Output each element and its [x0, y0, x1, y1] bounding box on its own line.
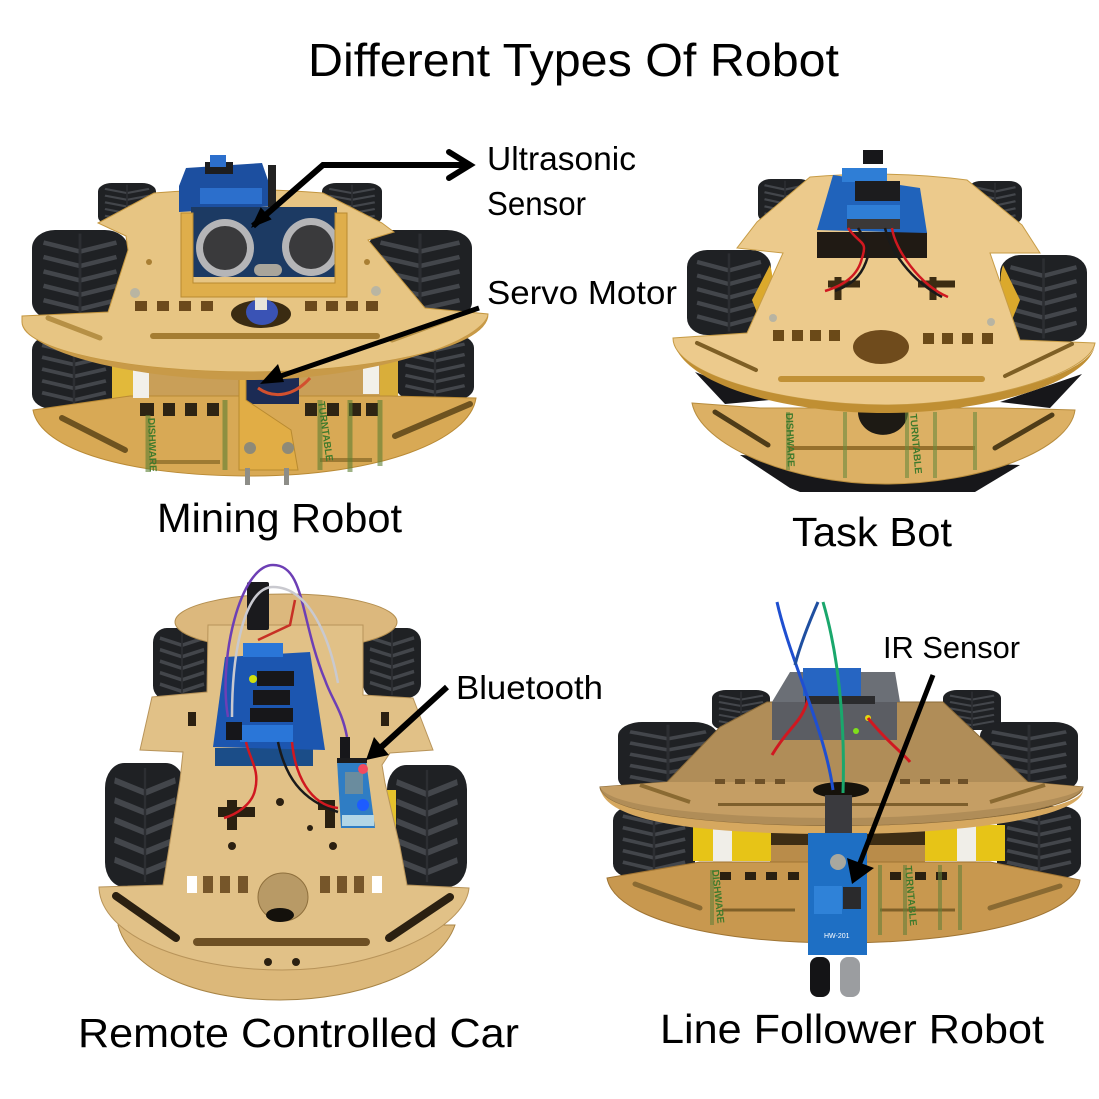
- wires: [825, 228, 948, 297]
- servo horn hole: [231, 296, 291, 328]
- arrow: ir sensor: [847, 675, 933, 884]
- servo bracket: [239, 368, 298, 470]
- label: bluetooth: Bluetooth: [456, 669, 603, 706]
- connector wires: [224, 565, 347, 818]
- lower plate: [118, 925, 455, 1000]
- motor driver shield: [772, 668, 900, 740]
- wheels: remote controlled car: [105, 628, 467, 887]
- sensor connector: [825, 795, 852, 843]
- wheels: line follower robot: [613, 690, 1081, 878]
- upper plate: [600, 702, 1083, 834]
- arrow: servo motor: [260, 308, 479, 384]
- lower plate: DISHWARE: [145, 418, 158, 472]
- motor driver shield: [213, 643, 325, 766]
- ir leds: [810, 957, 860, 997]
- upper plate: [22, 190, 488, 380]
- ultrasonic sensor: [191, 207, 340, 277]
- lower plate: [692, 403, 1075, 484]
- underside between plates: [136, 360, 380, 402]
- sensor bracket: [181, 213, 347, 297]
- label: ultrasonic sensor: Sensor: [487, 185, 586, 222]
- underside between plates: [770, 825, 925, 865]
- arrow: ultrasonic sensor: [253, 152, 470, 226]
- panel: remote controlled car: [78, 565, 603, 1056]
- back plate: [175, 594, 397, 650]
- lower plate: DISHWARE: [709, 869, 726, 924]
- lower plate: [607, 862, 1080, 943]
- arrow: bluetooth: [366, 687, 447, 760]
- motor driver shield: [817, 150, 927, 258]
- label: servo motor: Servo Motor: [487, 274, 677, 311]
- caption: task bot: Task Bot: [792, 509, 953, 555]
- upper plate: [673, 174, 1095, 413]
- upper plate: [99, 625, 469, 970]
- panel: task bot: [673, 150, 1095, 555]
- panel: line follower robot: [600, 602, 1083, 1052]
- relay switch: [247, 582, 269, 630]
- caption: mining robot: Mining Robot: [157, 495, 403, 541]
- support posts: [133, 360, 379, 398]
- title: Different Types Of Robot: [308, 34, 839, 86]
- black chassis underside: [695, 372, 1082, 492]
- lower plate: [33, 396, 476, 476]
- lower plate: DISHWARE: [783, 413, 796, 467]
- wheels: task bot: [687, 179, 1087, 342]
- ir sensor module: HW-201: [824, 933, 850, 940]
- caption: line follower robot: Line Follower Robot: [660, 1006, 1045, 1052]
- panel: mining robot: [22, 140, 677, 541]
- label: ir sensor: IR Sensor: [883, 630, 1020, 665]
- label: ultrasonic sensor: Ultrasonic: [487, 140, 636, 177]
- wheels: mining robot: [32, 183, 474, 409]
- yellow motors: [693, 825, 1005, 861]
- lower plate: TURNTABLE: [902, 865, 918, 927]
- screws: [244, 442, 294, 485]
- bluetooth module: [337, 737, 375, 828]
- ir sensor module: [808, 833, 867, 955]
- servo motor: [239, 368, 310, 404]
- connector wires: [772, 602, 910, 793]
- lower plate: TURNTABLE: [315, 401, 334, 463]
- caption: remote controlled car: Remote Controlled Car: [78, 1010, 519, 1056]
- support posts: [713, 825, 976, 870]
- label: ultrasonic sensor: [487, 140, 636, 222]
- lower plate: TURNTABLE: [907, 413, 923, 475]
- motor driver shield: [179, 155, 277, 212]
